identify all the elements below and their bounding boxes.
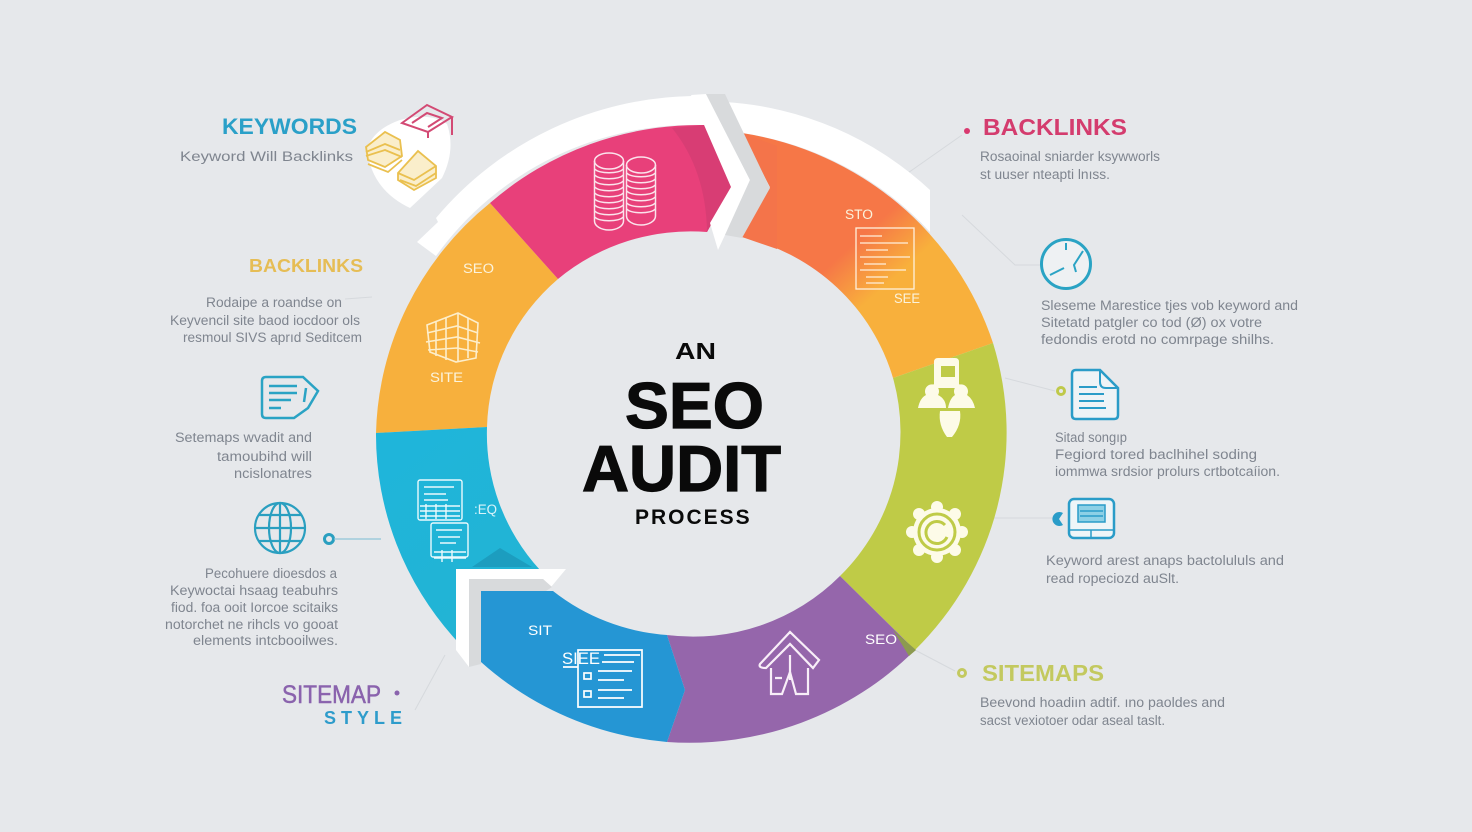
chevron arrow: white: [691, 94, 750, 250]
description: [1055, 430, 1280, 479]
subheading: STYLE: [324, 708, 407, 728]
white band: right arc: [725, 102, 930, 232]
segment: green: [840, 343, 1007, 650]
white band: left arc: [417, 96, 705, 256]
description: resmoul SIVS aprıd Seditcem: [183, 330, 362, 345]
description: Keyword arest anaps bactolululs and: [1046, 553, 1284, 568]
description: Sitad songıp: [1055, 430, 1127, 445]
description: Fegiord tored baclhihel soding: [1055, 447, 1257, 462]
icon backdrop: [367, 117, 451, 208]
description: Keywoctai hsaag teabuhrs: [170, 583, 338, 598]
ring labels: SEE: [894, 291, 920, 306]
icon: sitemap list: [562, 649, 642, 707]
panel: backlinks right: [964, 114, 1160, 182]
panel: monitor: [1046, 499, 1284, 586]
description: Rodaipe a roandse on: [206, 295, 342, 310]
segment: orange shade: [742, 133, 777, 249]
ring labels: SEO: [463, 261, 494, 276]
ring labels: STO: [845, 207, 873, 222]
description: Sleseme Marestice tjes vob keyword and: [1041, 298, 1298, 313]
icon: document: [1072, 370, 1118, 419]
connector line: [334, 538, 381, 540]
icon: globe: [255, 503, 305, 553]
description: [980, 149, 1160, 182]
segment: green purple overlap: [893, 630, 916, 656]
chevron arrow: grey: [706, 94, 770, 238]
ring labels: [430, 207, 920, 647]
description: fedondis erotd no comrpage shilhs.: [1041, 332, 1274, 347]
heading: BACKLINKS: [983, 114, 1127, 140]
description: elements intcbooilwes.: [193, 633, 338, 648]
heading: BACKLINKS: [249, 256, 363, 276]
heading: SITEMAP: [282, 681, 381, 709]
description: Keyvencil site baod iocdoor ols: [170, 313, 360, 328]
description: [1046, 553, 1284, 586]
connector mark: [1052, 512, 1063, 526]
title: [582, 338, 781, 529]
connector lines: [345, 135, 1055, 710]
icon: monitor: [1069, 499, 1114, 538]
panel: sitemaps right: [958, 660, 1225, 728]
connector dot: [1058, 388, 1064, 394]
description: Sitetatd patgler co tod (Ø) ox votre: [1041, 315, 1262, 330]
corner arrow: white: [456, 569, 566, 667]
heading: KEYWORDS: [222, 114, 357, 139]
panel: globe: [165, 503, 381, 648]
panel: sitemaps left: [175, 377, 318, 481]
icon: checklist document: [856, 228, 914, 289]
segment: purple: [667, 576, 915, 743]
icon: pink box: [402, 105, 452, 138]
title: AUDIT: [582, 432, 781, 505]
description: [165, 566, 338, 648]
icon: cyan documents: [418, 480, 468, 562]
segment: cyan: [376, 427, 540, 640]
description: read ropeciozd auSlt.: [1046, 571, 1179, 586]
description: Beevond hoadiın adtif. ıno paoldes and: [980, 695, 1225, 710]
icon: gold stacks: [366, 132, 436, 190]
description: [170, 295, 362, 345]
description: [1041, 298, 1298, 347]
segment: cyan shade: [472, 548, 532, 567]
icon: house: [760, 632, 819, 694]
description: iommwa srdsior prolurs crtbotcaíion.: [1055, 464, 1280, 479]
segment: blue: [481, 591, 685, 742]
ring labels: :EQ: [474, 502, 497, 517]
panel: document: [1055, 370, 1280, 479]
segment: orange to amber: [742, 133, 993, 378]
description: sacst vexiotoer odar aseal taslt.: [980, 713, 1165, 728]
description: [175, 430, 312, 481]
connector dot: [324, 534, 334, 544]
ring labels: SITE: [430, 370, 463, 385]
icon: sitemap list: SIEE: [562, 649, 600, 668]
panel: keywords: [180, 105, 452, 208]
description: Pecohuere dioesdos a: [205, 566, 337, 581]
dot: [964, 128, 970, 134]
icon: coin stacks: [594, 153, 656, 230]
description: notorchet ne rihcls vo gooat: [165, 617, 338, 632]
connector dot: [958, 670, 966, 676]
segment: pink shade: [672, 125, 733, 232]
title: AN: [675, 338, 716, 364]
description: Rosaoinal sniarder ksywworls: [980, 149, 1160, 164]
description: st uuser nteapti lnıss.: [980, 167, 1110, 182]
description: ncislonatres: [234, 466, 312, 481]
panel: backlinks left: [170, 256, 363, 345]
panel: sitemap style: [282, 681, 407, 728]
ring labels: SEO: [865, 632, 897, 647]
description: Setemaps wvadit and: [175, 430, 312, 445]
description: tamoubihd will: [217, 449, 312, 464]
icon: clock: [1042, 240, 1090, 288]
heading: SITEMAPS: [982, 660, 1104, 686]
description: [980, 695, 1225, 728]
description: Keyword Will Backlinks: [180, 149, 353, 164]
icon: gear with swirl: [906, 501, 968, 563]
ring: audit cycle: [376, 94, 1007, 743]
segment: pink: [490, 125, 733, 279]
ring labels: SIT: [528, 623, 552, 638]
description: fiod. foa ooit Iorcoe scitaiks: [171, 600, 338, 615]
dot: [394, 690, 400, 696]
segment: amber: [376, 203, 558, 433]
corner arrow: grey: [469, 579, 552, 667]
icon: tagged document: [262, 377, 318, 418]
icon: building wireframe: [426, 313, 480, 362]
title: PROCESS: [635, 506, 752, 529]
title: SEO: [625, 369, 764, 442]
icon: org chart: [918, 358, 975, 437]
panel: clock: [1041, 240, 1298, 347]
